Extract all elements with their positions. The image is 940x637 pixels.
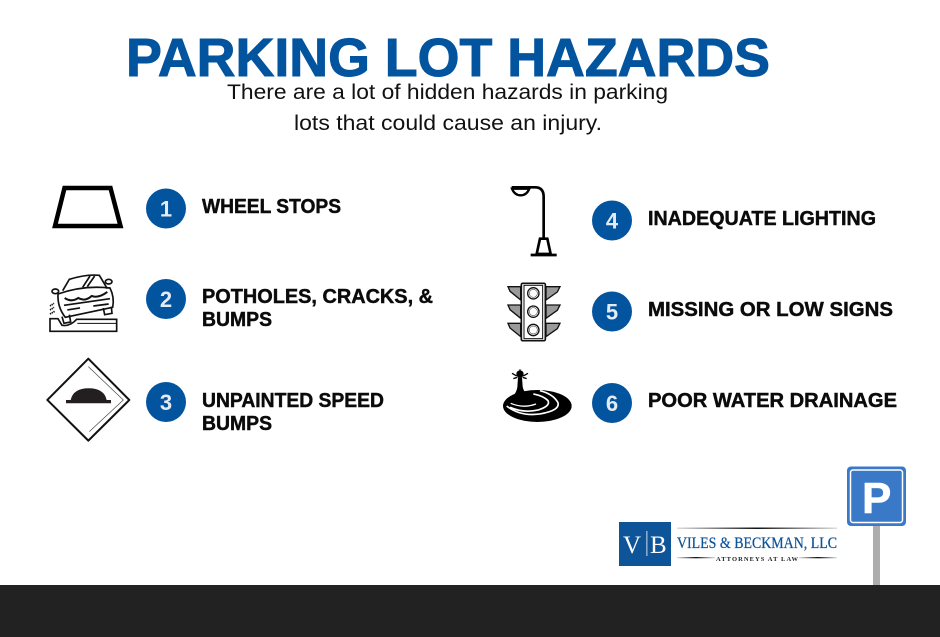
subtitle: There are a lot of hidden hazards in parking (227, 81, 668, 104)
number badge 5: 5 (606, 300, 618, 324)
item 4: inadequate lighting (512, 187, 876, 255)
logo: Viles & Beckman: ATTORNEYS AT LAW (716, 556, 798, 563)
label: unpainted speed bumps: BUMPS (202, 413, 272, 435)
number badge 2 (146, 279, 186, 319)
number badge 2: 2 (160, 287, 172, 312)
icon: car in pothole (50, 275, 117, 331)
logo: Viles & Beckman: B (650, 532, 667, 559)
number badge 4: 4 (606, 208, 619, 234)
number badge 3: 3 (160, 390, 172, 415)
subtitle (227, 81, 668, 135)
number badge 1 (146, 188, 186, 228)
label: inadequate lighting: INADEQUATE LIGHTING (648, 208, 876, 230)
item 1: wheel stops (55, 188, 341, 228)
item 3: unpainted speed bumps (47, 359, 384, 441)
label: wheel stops: WHEEL STOPS (202, 196, 341, 218)
number badge 4 (592, 200, 632, 240)
item 5: missing or low signs (508, 283, 893, 341)
icon: wheel stop (55, 188, 120, 226)
logo: Viles & Beckman: V (623, 532, 641, 559)
subtitle: lots that could cause an injury. (294, 112, 602, 135)
item 6: poor water drainage (503, 369, 897, 423)
label: poor water drainage: POOR WATER DRAINAGE (648, 390, 897, 412)
label: unpainted speed bumps: UNPAINTED SPEED (202, 390, 384, 412)
number badge 6 (592, 383, 632, 423)
item 2: potholes (50, 275, 433, 331)
title: PARKING LOT HAZARDS (126, 28, 770, 88)
label: potholes, cracks, bumps: POTHOLES, CRACKS, & (202, 286, 433, 308)
logo: Viles & Beckman (619, 522, 837, 566)
label: potholes, cracks, bumps (202, 286, 433, 331)
label: unpainted speed bumps (202, 390, 384, 435)
number badge 1: 1 (160, 196, 172, 222)
icon: traffic light (508, 283, 560, 341)
number badge 5 (592, 292, 632, 332)
icon: street lamp (512, 187, 557, 255)
number badge 3 (146, 382, 186, 422)
parking sign (847, 466, 906, 585)
icon: water puddle (503, 369, 572, 422)
footer band (0, 585, 940, 637)
parking sign: P (862, 474, 891, 523)
label: potholes, cracks, bumps: BUMPS (202, 309, 272, 331)
number badge 6: 6 (606, 391, 618, 416)
label: missing or low signs: MISSING OR LOW SIGNS (648, 299, 893, 321)
icon: speed bump sign (47, 359, 129, 441)
logo: Viles & Beckman: VILES & BECKMAN, LLC (677, 535, 837, 552)
